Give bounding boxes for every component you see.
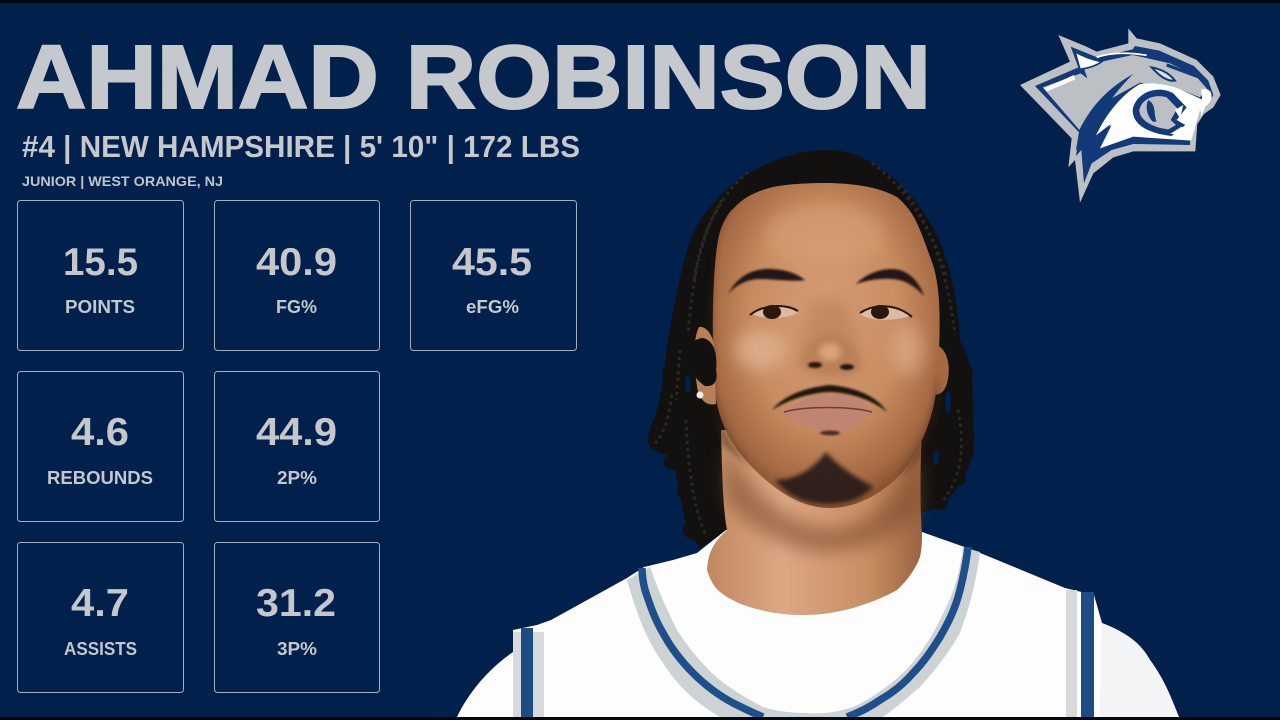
- jersey collar grey band: [627, 547, 980, 717]
- nose: [800, 335, 862, 375]
- top black bar: [0, 0, 1280, 3]
- stat card: points: [18, 200, 184, 350]
- stat card: eFG%: 45.5: [452, 241, 532, 284]
- icon: wildcat logo: [1020, 28, 1221, 203]
- stat card: rebounds: REBOUNDS: [47, 468, 153, 488]
- jersey collar blue trim: [642, 547, 968, 717]
- stat card: eFG%: [410, 200, 576, 350]
- stat card: 3P%: [214, 542, 380, 692]
- player photo: [457, 150, 1179, 717]
- neck shadow: [725, 445, 921, 552]
- body and jersey: [457, 530, 1179, 717]
- title: AHMAD ROBINSON: [16, 28, 931, 128]
- stat card: 2P%: [214, 372, 380, 522]
- subtitle: class and hometown: JUNIOR | WEST ORANGE, NJ: [22, 173, 223, 189]
- stat card: FG%: [214, 200, 380, 350]
- soul patch: [820, 430, 840, 436]
- stat card: 3P%: 3P%: [277, 639, 317, 659]
- mustache: [772, 385, 887, 412]
- stat card: rebounds: [18, 372, 184, 522]
- hair curl over ear: [687, 338, 717, 386]
- stat card: points: POINTS: [65, 297, 135, 317]
- subtitle: player info: #4 | NEW HAMPSHIRE | 5' 10" | 172 LBS: [22, 130, 580, 164]
- stat card: points: 15.5: [63, 241, 138, 284]
- stat card: assists: ASSISTS: [64, 639, 137, 659]
- nose bridge shadow: [800, 300, 862, 375]
- lips: [783, 394, 873, 431]
- stat card: 3P%: 31.2: [256, 582, 336, 625]
- stat card: FG%: 40.9: [256, 241, 337, 284]
- stat card: assists: [18, 542, 184, 692]
- earring: [696, 392, 704, 398]
- eyes: [750, 305, 912, 320]
- stat card: rebounds: 4.6: [71, 411, 129, 454]
- stat card: FG%: FG%: [276, 297, 317, 317]
- goatee: [775, 452, 873, 504]
- stat card: assists: 4.7: [71, 582, 129, 625]
- hair gaps: [685, 375, 951, 466]
- hair back: [648, 150, 975, 548]
- face: [687, 160, 949, 508]
- stat card: 2P%: 2P%: [277, 468, 317, 488]
- eyebrows: [728, 269, 924, 296]
- left ear: [694, 327, 716, 404]
- hairline: [718, 160, 932, 262]
- stat card: eFG%: eFG%: [466, 297, 519, 317]
- bottom black bar: [0, 717, 1280, 720]
- neck: [707, 430, 922, 615]
- stat card: 2P%: 44.9: [256, 411, 337, 454]
- jersey arm stripes: [513, 632, 544, 717]
